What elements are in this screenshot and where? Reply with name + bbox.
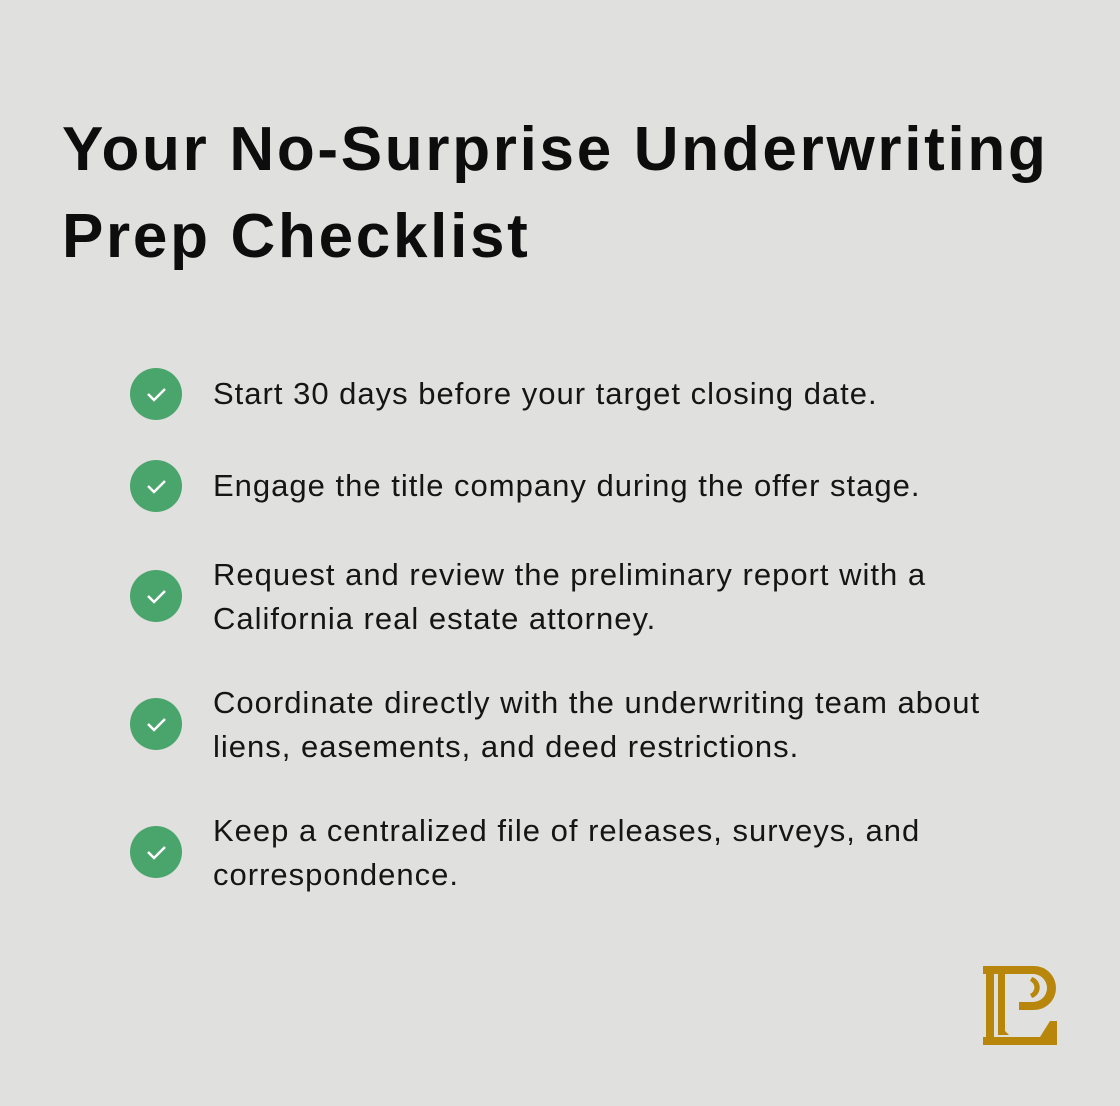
logo	[983, 966, 1057, 1045]
text 3	[213, 557, 926, 636]
icon: check	[130, 570, 182, 622]
title: Your No-Surprise Underwriting	[62, 115, 1049, 184]
title	[62, 115, 1049, 271]
text 5: correspondence.	[213, 857, 459, 892]
icon: check	[130, 368, 182, 420]
text 4: Coordinate directly with the underwriting team about	[213, 685, 980, 720]
text 3: California real estate attorney.	[213, 601, 656, 636]
item 1	[130, 368, 878, 420]
icon: check	[130, 698, 182, 750]
item 2	[130, 460, 920, 512]
text 4	[213, 685, 980, 764]
icon: check	[130, 460, 182, 512]
item 5	[130, 813, 920, 892]
icon: check	[130, 826, 182, 878]
title: Prep Checklist	[62, 202, 531, 271]
item 3	[130, 557, 926, 636]
text 1: Start 30 days before your target closing date.	[213, 376, 878, 411]
text 3: Request and review the preliminary report with a	[213, 557, 926, 592]
text 2: Engage the title company during the offer stage.	[213, 468, 920, 503]
item 4	[130, 685, 980, 764]
text 5: Keep a centralized file of releases, surveys, and	[213, 813, 920, 848]
text 4: liens, easements, and deed restrictions.	[213, 729, 799, 764]
text 5	[213, 813, 920, 892]
